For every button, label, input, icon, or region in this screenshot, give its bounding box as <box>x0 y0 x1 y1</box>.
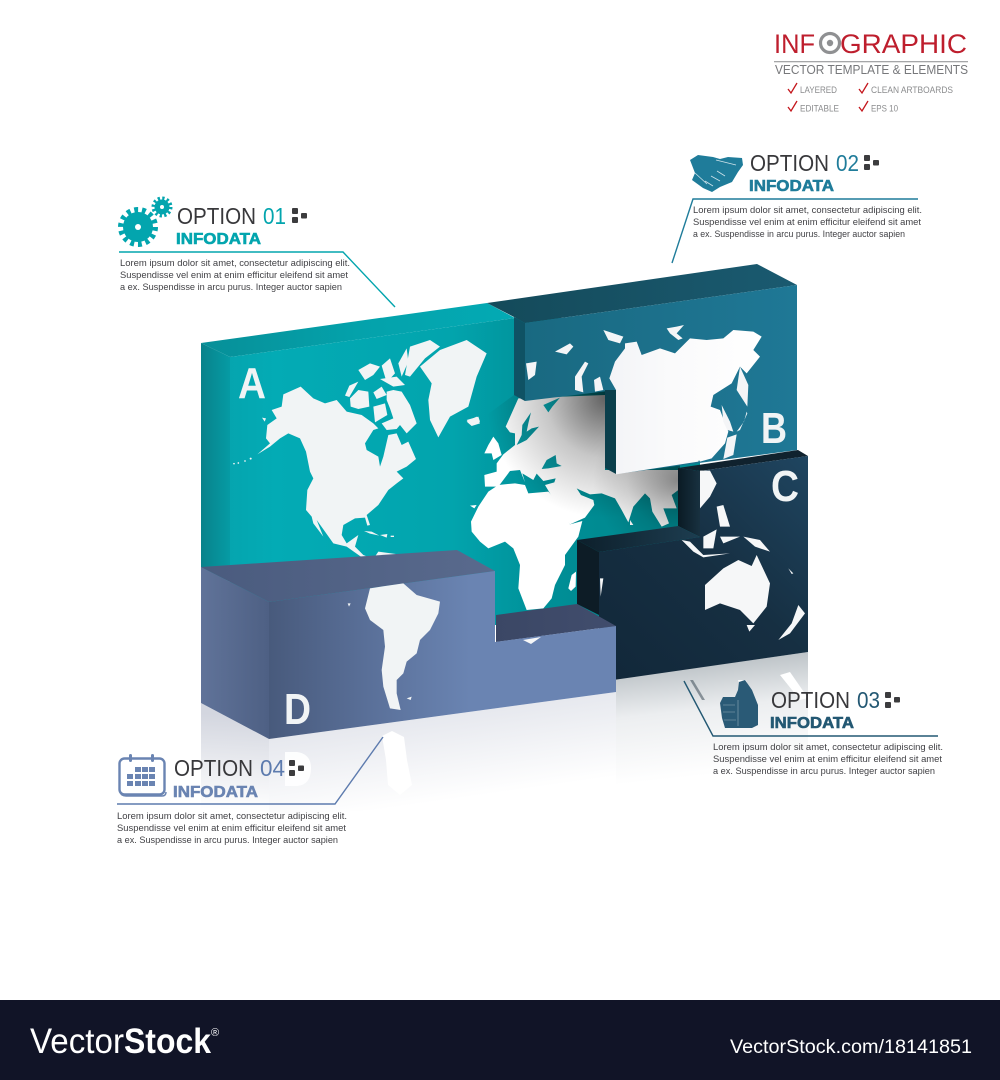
option 03 heading: 03 <box>857 687 880 713</box>
panel: block C <box>577 450 808 682</box>
panel: block B <box>487 264 797 474</box>
option 04 body text: a ex. Suspendisse in arcu purus. Integer auctor sapien <box>117 835 338 845</box>
block A left face <box>201 343 230 582</box>
checklist: EPS 10 <box>871 104 898 114</box>
block B notch side <box>605 390 616 474</box>
icon: calendar <box>120 754 166 796</box>
icon: thumbs up <box>720 680 758 728</box>
option 03 body text: Suspendisse vel enim at enim efficitur eleifend sit amet <box>713 754 942 764</box>
option 02 heading: OPTION <box>750 150 829 176</box>
callout: option 01 <box>119 198 395 307</box>
panel: block A (teal) <box>201 303 700 625</box>
option 01 body text: Suspendisse vel enim at enim efficitur eleifend sit amet <box>120 270 348 280</box>
block A top face <box>201 303 515 357</box>
panel: block D <box>201 550 616 739</box>
leader line <box>684 681 938 736</box>
icon: dots <box>289 760 304 776</box>
option 04 body text: Suspendisse vel enim at enim efficitur eleifend sit amet <box>117 823 346 833</box>
block C notch inner face <box>678 468 700 537</box>
world map: Greenland and Iceland <box>420 340 487 437</box>
callout: option 03 <box>684 680 943 776</box>
icon: gears <box>121 198 170 244</box>
option 01 subheading: INFODATA <box>176 231 261 248</box>
option 02 body text: Suspendisse vel enim at enim efficitur eleifend sit amet <box>693 217 921 227</box>
checklist: EDITABLE <box>800 104 839 114</box>
leader line <box>117 737 383 804</box>
block B top face <box>487 264 797 323</box>
hole shadow <box>500 391 680 532</box>
world map: northern Asia on block B <box>526 325 762 474</box>
footer logo: ® <box>211 1027 219 1039</box>
subtitle: VECTOR TEMPLATE & ELEMENTS <box>775 63 968 77</box>
option 02 subheading: INFODATA <box>749 178 834 195</box>
option 03 heading: OPTION <box>771 687 850 713</box>
icon: dots <box>864 155 879 170</box>
footer logo <box>30 1022 219 1061</box>
icon: dots <box>885 692 900 708</box>
letter B: B <box>761 404 787 453</box>
block C top strip <box>678 450 808 471</box>
checklist <box>788 83 953 114</box>
floor reflection <box>201 652 808 815</box>
block C lower top face <box>577 526 700 552</box>
option 03 body text <box>713 742 943 776</box>
letter C: C <box>771 462 799 511</box>
block B front face <box>525 285 797 474</box>
world map: South America on block D <box>348 583 440 710</box>
option 01 heading: OPTION <box>177 203 256 229</box>
option 04 body text <box>117 811 347 845</box>
block B left face <box>514 317 525 401</box>
leader line <box>119 252 395 307</box>
footer url: VectorStock.com/18141851 <box>730 1036 972 1058</box>
leader line <box>672 199 918 263</box>
option 01 body text: a ex. Suspendisse in arcu purus. Integer auctor sapien <box>120 282 342 292</box>
option 04 heading: 04 <box>260 755 285 781</box>
world map: North America on block A <box>233 340 440 565</box>
option 04 heading: OPTION <box>174 755 253 781</box>
option 01 body text <box>120 258 350 292</box>
option 04 subheading: INFODATA <box>173 784 258 801</box>
block A front face <box>230 318 700 625</box>
icon: dots <box>292 208 307 223</box>
block C front face <box>599 456 808 682</box>
option 01 body text: Lorem ipsum dolor sit amet, consectetur adipiscing elit. <box>120 258 350 268</box>
callout: option 02 <box>672 150 922 263</box>
option 04 body text: Lorem ipsum dolor sit amet, consectetur adipiscing elit. <box>117 811 347 821</box>
footer logo: Stock <box>124 1022 211 1061</box>
block D notch inner face <box>496 604 616 642</box>
footer bar <box>0 1000 1000 1080</box>
checklist: CLEAN ARTBOARDS <box>871 85 953 95</box>
checklist: LAYERED <box>800 85 837 95</box>
block D front face <box>269 571 616 739</box>
world map: Oceania on block C <box>600 471 805 640</box>
title block <box>774 29 968 114</box>
title INFOGRAPHIC: INF <box>774 29 815 59</box>
small Africa tip in notch <box>523 637 541 644</box>
title INFOGRAPHIC <box>774 29 967 59</box>
option 03 subheading: INFODATA <box>770 715 854 732</box>
block C left face <box>577 540 599 615</box>
callout: option 04 <box>117 737 383 845</box>
footer logo: Vector <box>30 1022 124 1061</box>
option 03 body text: a ex. Suspendisse in arcu purus. Integer auctor sapien <box>713 766 935 776</box>
option 02 body text <box>693 205 922 239</box>
option 02 body text: Lorem ipsum dolor sit amet, consectetur adipiscing elit. <box>693 205 922 215</box>
icon: handshake <box>690 155 743 192</box>
world map: Europe, Africa and Asia on block A <box>467 395 678 642</box>
letter A: A <box>238 359 266 408</box>
option 01 heading: 01 <box>263 203 286 229</box>
option 02 body text: a ex. Suspendisse in arcu purus. Integer auctor sapien <box>693 229 905 239</box>
option 02 heading: 02 <box>836 150 859 176</box>
letter D: D <box>284 685 311 734</box>
title INFOGRAPHIC: GRAPHIC <box>840 29 967 59</box>
option 03 body text: Lorem ipsum dolor sit amet, consectetur adipiscing elit. <box>713 742 943 752</box>
title divider <box>774 61 968 62</box>
block D left face <box>201 567 269 739</box>
block D top face <box>201 550 495 602</box>
